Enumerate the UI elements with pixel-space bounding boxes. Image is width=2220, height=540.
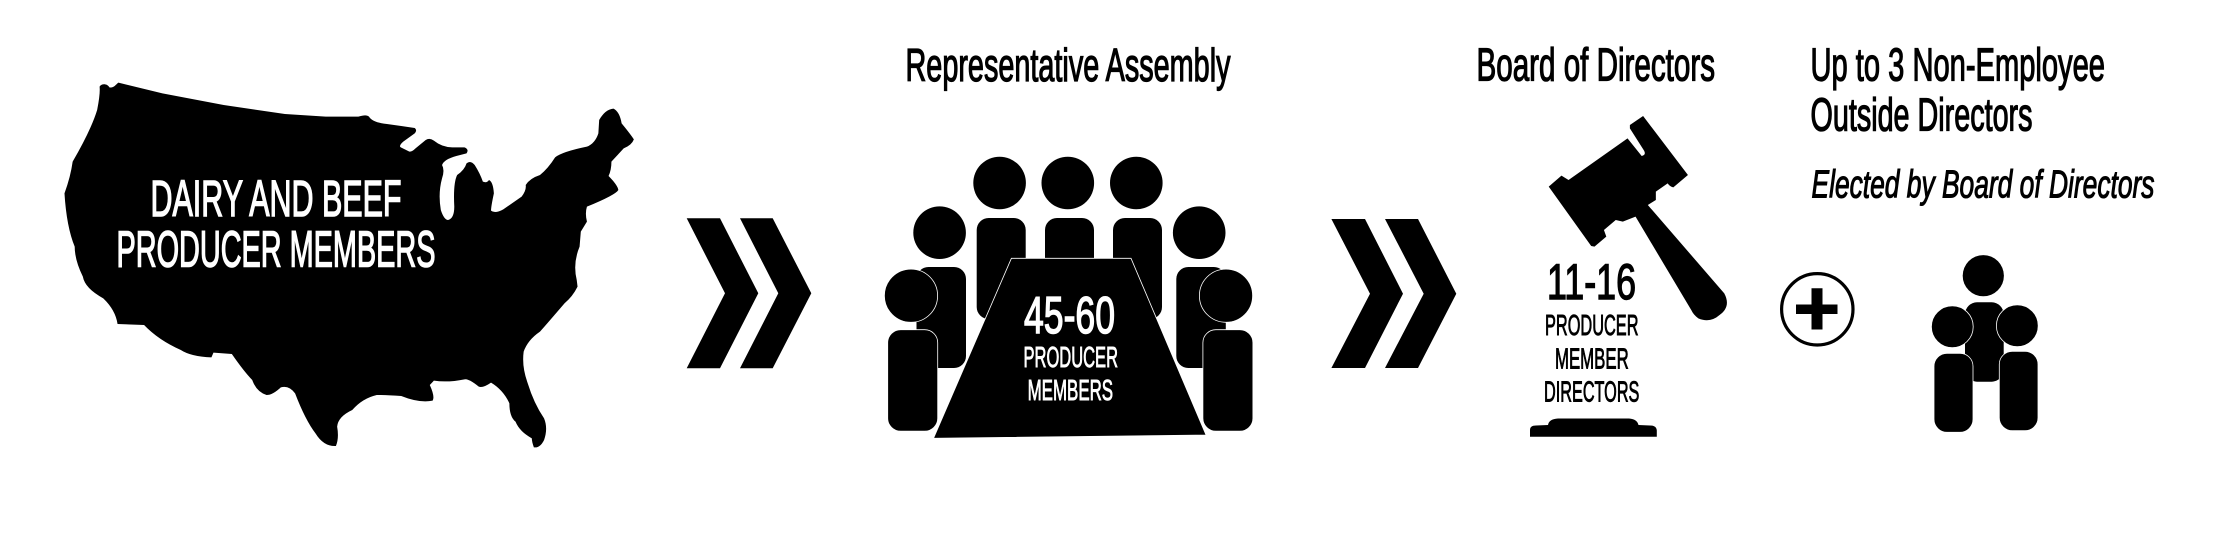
icon: plus sign in circle [1782,274,1853,345]
text: 45-60 producer members: MEMBERS [1028,375,1113,407]
text: 45-60 producer members [1024,287,1118,407]
heading: up to 3 non-employee outside directors [1810,39,2105,141]
icon: back row of people [973,157,1163,319]
heading: up to 3 non-employee outside directors: Outside Directors [1810,89,2032,141]
text: 45-60 producer members: 45-60 [1024,287,1115,345]
heading: board of directors: Board of Directors [1476,39,1715,91]
icon: gavel base [1530,418,1657,437]
icon: table [934,258,1206,438]
text: dairy and beef producer members: DAIRY AND BEEF [150,170,402,227]
icon: front row of people [884,269,1253,431]
icon: middle row of people [913,206,1226,368]
panel: board of directors gavel [1530,116,1727,437]
text: dairy and beef producer members [116,170,436,278]
text: 11-16 producer member directors: 11-16 [1547,254,1636,310]
panel: representative assembly people and table [884,157,1253,438]
text: 11-16 producer member directors: PRODUCER [1545,310,1638,342]
icon: gavel [1549,116,1727,320]
text: 11-16 producer member directors: MEMBER [1555,343,1629,375]
arrow: double chevron 1 [687,218,811,368]
icon: three outside directors [1931,255,2038,432]
panel: producer members map [64,83,634,447]
text: dairy and beef producer members: PRODUCER MEMBERS [116,221,436,278]
icon: map of the United States [64,83,634,447]
text: 45-60 producer members: PRODUCER [1024,342,1118,374]
heading: representative assembly: Representative Assembly [906,39,1230,91]
arrow: double chevron 2 [1331,219,1456,368]
text: 11-16 producer member directors: DIRECTORS [1544,377,1639,409]
text: 11-16 producer member directors [1544,254,1639,409]
